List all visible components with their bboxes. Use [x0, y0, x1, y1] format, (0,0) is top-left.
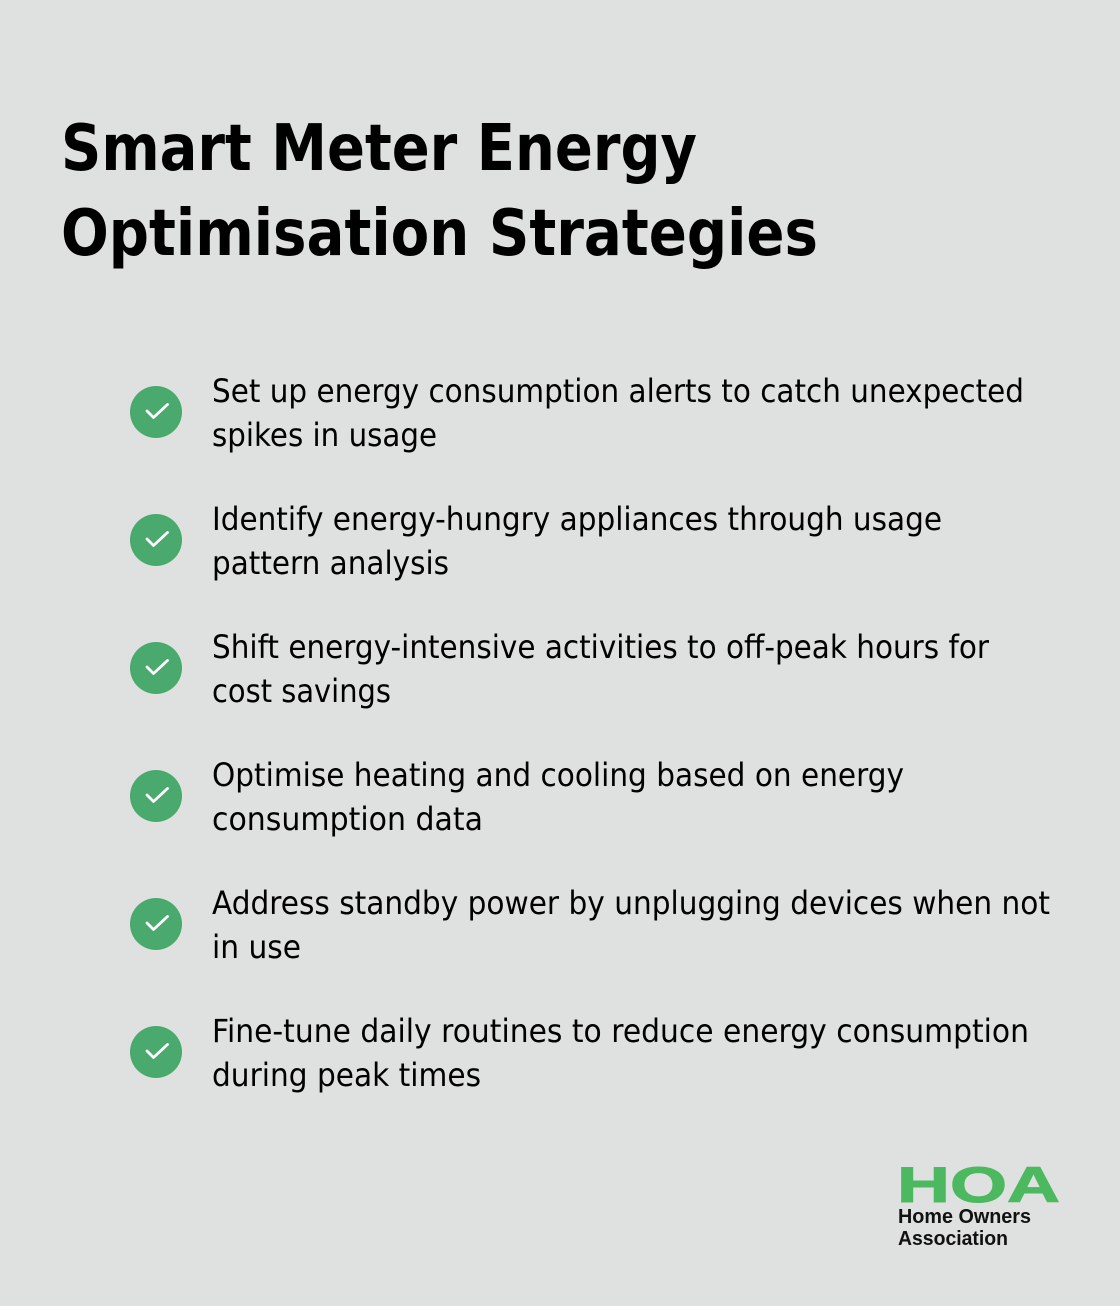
item 1: energy alerts: [130, 372, 1024, 454]
item 1: energy alerts: spikes in usage: [212, 416, 437, 454]
item 6: daily routines: during peak times: [212, 1056, 481, 1094]
item 3: off-peak hours: Shift energy-intensive activities to off-peak hours for: [212, 628, 990, 666]
item 4: heating and cooling: consumption data: [212, 800, 483, 838]
item 4: heating and cooling: [130, 756, 904, 838]
item 1: energy alerts: Set up energy consumption alerts to catch unexpected: [212, 372, 1024, 410]
title: [61, 112, 818, 271]
logo wordmark: Home Owners: [898, 1206, 1031, 1228]
item 5: standby power: [130, 884, 1050, 966]
logo: HOA Home Owners Association: [897, 1157, 1060, 1250]
item 5: standby power: in use: [212, 928, 301, 966]
item 4: heating and cooling: Optimise heating and cooling based on energy: [212, 756, 904, 794]
checklist: [130, 372, 1050, 1094]
item 2: energy-hungry appliances: Identify energy-hungry appliances through usage: [212, 500, 942, 538]
item 3: off-peak hours: [130, 628, 990, 710]
item 6: daily routines: [130, 1012, 1029, 1094]
item 2: energy-hungry appliances: [130, 500, 942, 582]
item 2: energy-hungry appliances: pattern analysis: [212, 544, 449, 582]
title: Smart Meter Energy: [61, 112, 697, 186]
item 3: off-peak hours: cost savings: [212, 672, 391, 710]
item 6: daily routines: Fine-tune daily routines to reduce energy consumption: [212, 1012, 1029, 1050]
logo letters HOA: HOA: [897, 1157, 1060, 1213]
logo: HOA Home Owners Association: Association: [898, 1228, 1008, 1250]
title: Optimisation Strategies: [61, 197, 818, 271]
item 5: standby power: Address standby power by unplugging devices when not: [212, 884, 1050, 922]
